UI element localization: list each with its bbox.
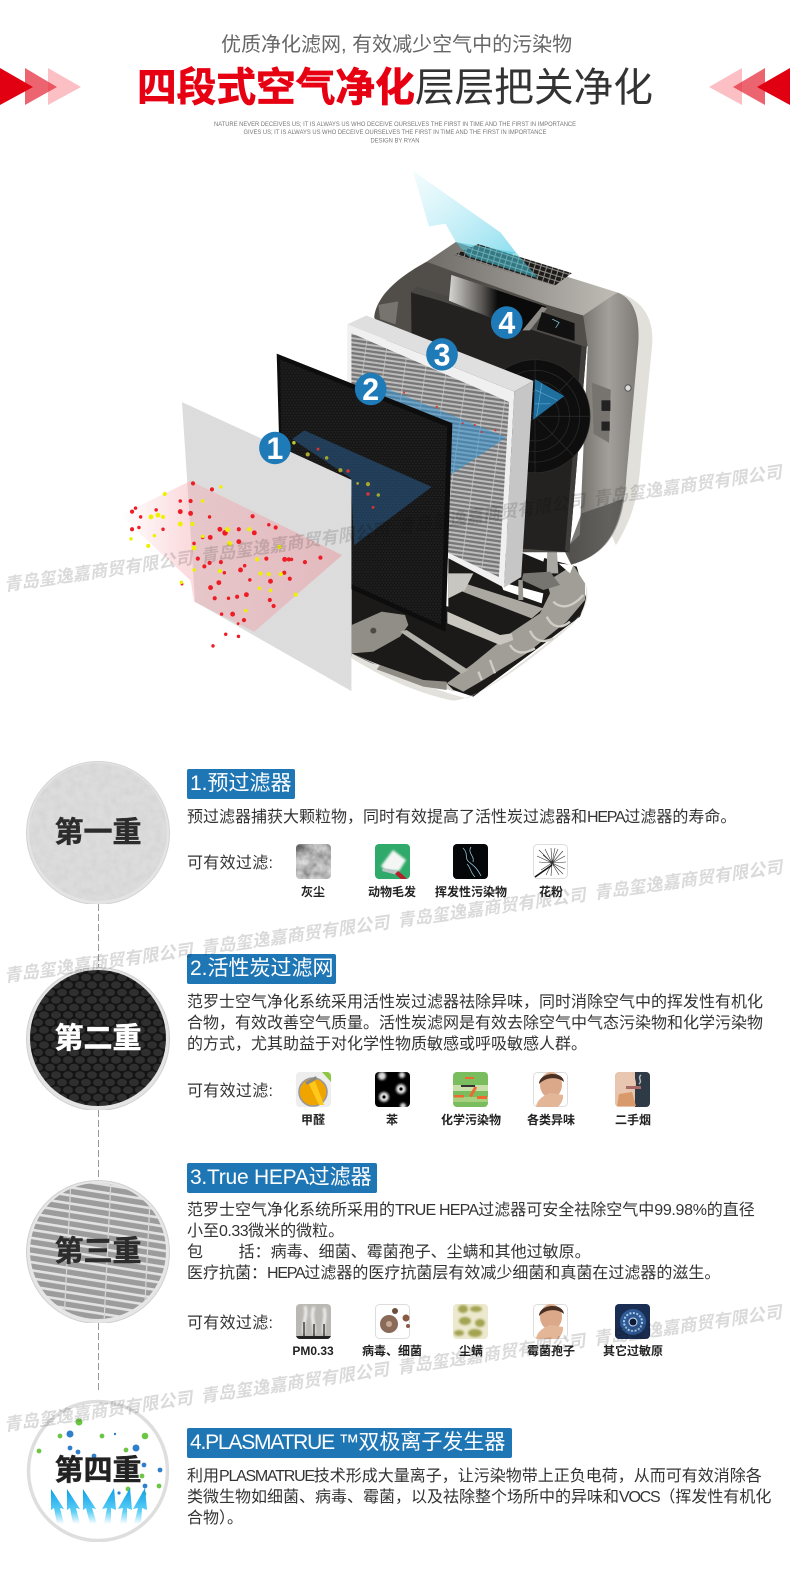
filter caption 1: 可有效过滤: bbox=[187, 855, 273, 872]
outflow air arrow bbox=[413, 171, 516, 255]
icon: odors bbox=[533, 1072, 568, 1107]
heading 3: 3.True HEPA过滤器 bbox=[190, 1166, 372, 1189]
illustration: exploded purifier with four filters bbox=[129, 171, 652, 700]
icon: other allergens bbox=[615, 1304, 650, 1339]
english small print: NATURE NEVER DECEIVES US; IT IS ALWAYS US WHO DECEIVE OURSELVES THE FIRST IN TIME AND THE FIRST IN IMPORTANCE bbox=[214, 122, 576, 128]
description 2 line 2: 合物，有效改善空气质量。活性炭滤网是有效去除空气中气态污染物和化学污染物 bbox=[187, 1015, 763, 1032]
watermark rows: 青岛玺逸嘉商贸有限公司 bbox=[199, 912, 393, 958]
section 1: pre-filter bbox=[187, 769, 736, 899]
icon: second-hand smoke bbox=[615, 1072, 650, 1107]
circle: third stage: 第三重 bbox=[54, 1235, 142, 1268]
icon: dust mites bbox=[453, 1304, 488, 1339]
watermark rows: 青岛玺逸嘉商贸有限公司 bbox=[592, 1301, 786, 1349]
number badges: 1 bbox=[267, 431, 283, 466]
circle: first stage: 第一重 bbox=[54, 816, 142, 849]
section 2: activated carbon bbox=[187, 954, 763, 1127]
label odors: 各类异味 bbox=[527, 1113, 575, 1127]
filter 1 pre-filter bbox=[179, 400, 354, 694]
polluted air beam bbox=[120, 481, 342, 632]
decorative arrows right bbox=[709, 68, 790, 105]
label animal hair: 动物毛发 bbox=[368, 885, 416, 899]
heading 1: 1.预过滤器 bbox=[190, 772, 292, 795]
label other allergens: 其它过敏原 bbox=[603, 1344, 663, 1358]
watermark rows: 青岛玺逸嘉商贸有限公司 bbox=[199, 1359, 393, 1406]
watermark rows: 青岛玺逸嘉商贸有限公司 bbox=[396, 1330, 589, 1378]
description 2 line 3: 的方式，尤其助益于对化学性物质敏感或呼吸敏感人群。 bbox=[187, 1036, 587, 1053]
circle: second stage bbox=[26, 967, 170, 1110]
english small print: GIVES US; IT IS ALWAYS US WHO DECEIVE OURSELVES THE FIRST IN TIME AND THE FIRST IN IMPORTANCE bbox=[244, 130, 546, 136]
filter 2 carbon bbox=[277, 354, 452, 632]
circle: fourth stage: 第四重 bbox=[54, 1454, 142, 1487]
icon: volatile pollutants bbox=[453, 844, 488, 879]
decorative arrows left bbox=[0, 68, 81, 105]
icon: formaldehyde bbox=[296, 1072, 331, 1107]
dashed connector lines bbox=[98, 904, 99, 1390]
silver side shell bbox=[564, 293, 639, 565]
watermark rows: 青岛玺逸嘉商贸有限公司 bbox=[592, 461, 786, 509]
number badges: 4 bbox=[498, 305, 515, 341]
watermark rows: 青岛玺逸嘉商贸有限公司 bbox=[3, 547, 196, 595]
left inner clip bbox=[378, 301, 398, 324]
description 3 line 3: 包 括：病毒、细菌、霉菌孢子、尘螨和其他过敏原。 bbox=[187, 1244, 591, 1261]
heading 4: 4.PLASMATRUE ™双极离子发生器 bbox=[190, 1431, 505, 1454]
description 3: 范罗士空气净化系统所采用的TRUE HEPA过滤器可安全祛除空气中99.98%的直径 bbox=[187, 1202, 755, 1219]
watermark rows: 青岛玺逸嘉商贸有限公司 bbox=[592, 856, 786, 903]
filter caption 3: 可有效过滤: bbox=[187, 1315, 273, 1332]
circle: second stage: 第二重 bbox=[54, 1022, 142, 1055]
number badges bbox=[259, 305, 523, 466]
section 3: True HEPA bbox=[187, 1163, 755, 1358]
top surface bbox=[427, 242, 618, 315]
label pollen: 花粉 bbox=[539, 885, 563, 899]
icon: benzene bbox=[375, 1072, 410, 1107]
fan bbox=[480, 360, 590, 473]
handle pocket bbox=[449, 275, 546, 330]
icon: animal hair bbox=[375, 844, 410, 879]
label chemical pollutants: 化学污染物 bbox=[441, 1113, 501, 1127]
filter caption 2: 可有效过滤: bbox=[187, 1083, 273, 1100]
white rim bbox=[602, 293, 652, 545]
description 4: 利用PLASMATRUE技术形成大量离子，让污染物带上正负电荷，从而可有效消除各 bbox=[187, 1468, 762, 1485]
watermark rows: 青岛玺逸嘉商贸有限公司 bbox=[3, 1387, 196, 1435]
heading 2: 2.活性炭过滤网 bbox=[190, 957, 334, 980]
side latch bbox=[592, 383, 611, 443]
vent grille bbox=[454, 244, 572, 286]
label benzene: 苯 bbox=[386, 1113, 398, 1127]
watermark rows: 青岛玺逸嘉商贸有限公司 bbox=[199, 519, 393, 566]
watermark rows: 青岛玺逸嘉商贸有限公司 bbox=[396, 490, 589, 538]
main title: 四段式空气净化层层把关净化 bbox=[137, 66, 653, 110]
description 4 line 3: 合物）。 bbox=[187, 1510, 243, 1527]
number badges: 3 bbox=[434, 337, 450, 372]
section 4: PlasmaTrue bbox=[187, 1428, 771, 1527]
circle: first stage bbox=[26, 761, 170, 904]
watermark rows: 青岛玺逸嘉商贸有限公司 bbox=[396, 884, 590, 931]
english small print bbox=[214, 122, 576, 144]
description 3 line 2: 小至0.33微米的微粒。 bbox=[187, 1223, 344, 1240]
filter 4 panel bbox=[411, 291, 587, 552]
icon: pollen bbox=[533, 844, 568, 879]
label mold spores: 霉菌孢子 bbox=[527, 1344, 575, 1358]
icon: chemical pollutants bbox=[453, 1072, 488, 1107]
label virus and bacteria: 病毒、细菌 bbox=[362, 1344, 422, 1358]
description 1: 预过滤器捕获大颗粒物，同时有效提高了活性炭过滤器和HEPA过滤器的寿命。 bbox=[187, 809, 736, 826]
subtitle: 优质净化滤网, 有效减少空气中的污染物 bbox=[221, 34, 572, 56]
shell lower shadow bbox=[568, 499, 623, 565]
number badges: 2 bbox=[362, 372, 379, 407]
label formaldehyde: 甲醛 bbox=[301, 1113, 325, 1127]
icon: mold spores bbox=[533, 1304, 568, 1339]
english small print: DESIGN BY RYAN bbox=[370, 138, 420, 144]
icon: dust bbox=[296, 844, 331, 879]
icon: virus and bacteria bbox=[375, 1304, 410, 1339]
circle: fourth stage bbox=[26, 1400, 170, 1542]
red particles bbox=[130, 481, 323, 648]
purifier base tray bbox=[352, 545, 587, 701]
label PM0.33: PM0.33 bbox=[292, 1344, 334, 1358]
yellow particles bbox=[129, 485, 298, 612]
icon: PM0.33 bbox=[296, 1304, 331, 1339]
label volatile pollutants: 挥发性污染物 bbox=[435, 885, 507, 899]
label dust: 灰尘 bbox=[301, 885, 325, 899]
description 3 line 4: 医疗抗菌：HEPA过滤器的医疗抗菌层有效减少细菌和真菌在过滤器的滋生。 bbox=[187, 1265, 720, 1282]
purifier body rear bbox=[374, 262, 618, 552]
particles past filter 1 bbox=[292, 391, 496, 509]
label second-hand smoke: 二手烟 bbox=[615, 1113, 651, 1127]
description 2: 范罗士空气净化系统采用活性炭过滤器祛除异味，同时消除空气中的挥发性有机化 bbox=[187, 994, 763, 1011]
circle: third stage bbox=[26, 1180, 170, 1323]
label dust mites: 尘螨 bbox=[459, 1344, 483, 1358]
filter 3 HEPA bbox=[347, 315, 533, 588]
description 4 line 2: 类微生物如细菌、病毒、霉菌，以及祛除整个场所中的异味和VOCS（挥发性有机化 bbox=[187, 1489, 771, 1506]
watermark rows: 青岛玺逸嘉商贸有限公司 bbox=[3, 939, 196, 986]
